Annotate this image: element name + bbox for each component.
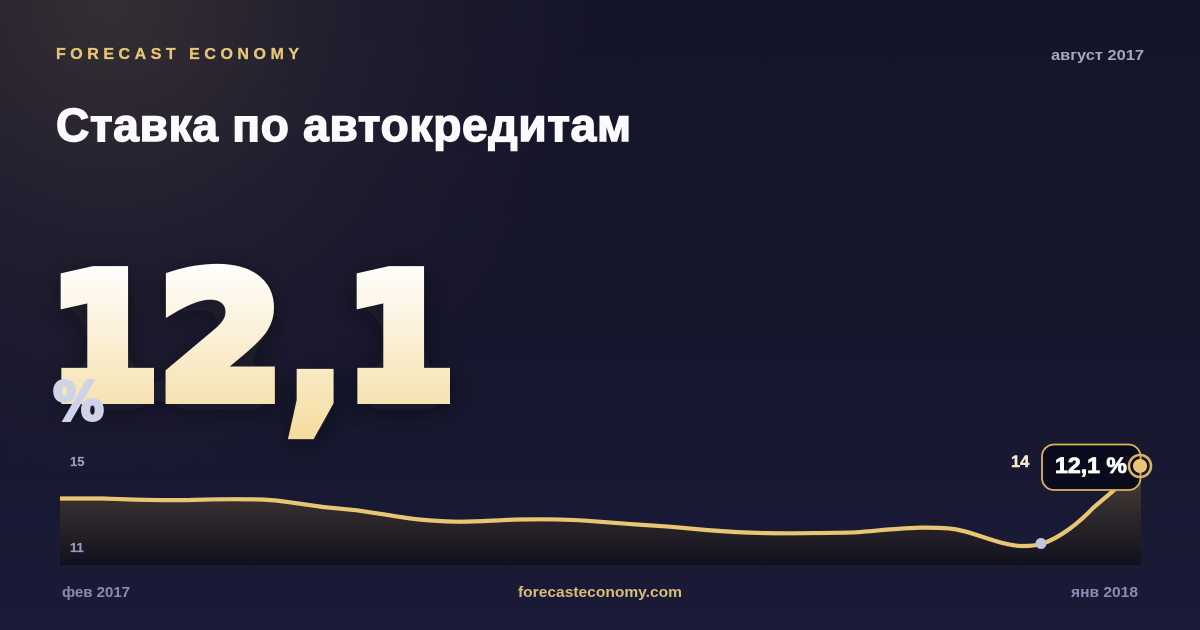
percent sign: % (53, 372, 104, 433)
big number: 1 (50, 239, 158, 438)
title: Ставка по автокредитам (56, 99, 631, 151)
low point marker (1036, 538, 1046, 549)
axis label 15: 15 (70, 454, 84, 469)
big number: 2 (159, 240, 283, 438)
rate line (60, 466, 1140, 546)
current value marker (1129, 455, 1151, 477)
website: forecasteconomy.com (518, 584, 682, 601)
big number (50, 239, 454, 449)
value callout (1042, 444, 1140, 490)
label 14: 14 (1011, 453, 1030, 471)
big number: 1 (346, 239, 454, 438)
start date: фев 2017 (62, 584, 130, 601)
big number: , (288, 251, 342, 449)
brand label: FORECAST ECONOMY (56, 46, 303, 63)
line chart (60, 466, 1141, 565)
date label: август 2017 (1051, 47, 1144, 64)
end date: янв 2018 (1071, 584, 1138, 601)
value callout: 12,1 % (1055, 453, 1127, 478)
axis label 11: 11 (70, 540, 84, 555)
chart area (60, 466, 1141, 565)
